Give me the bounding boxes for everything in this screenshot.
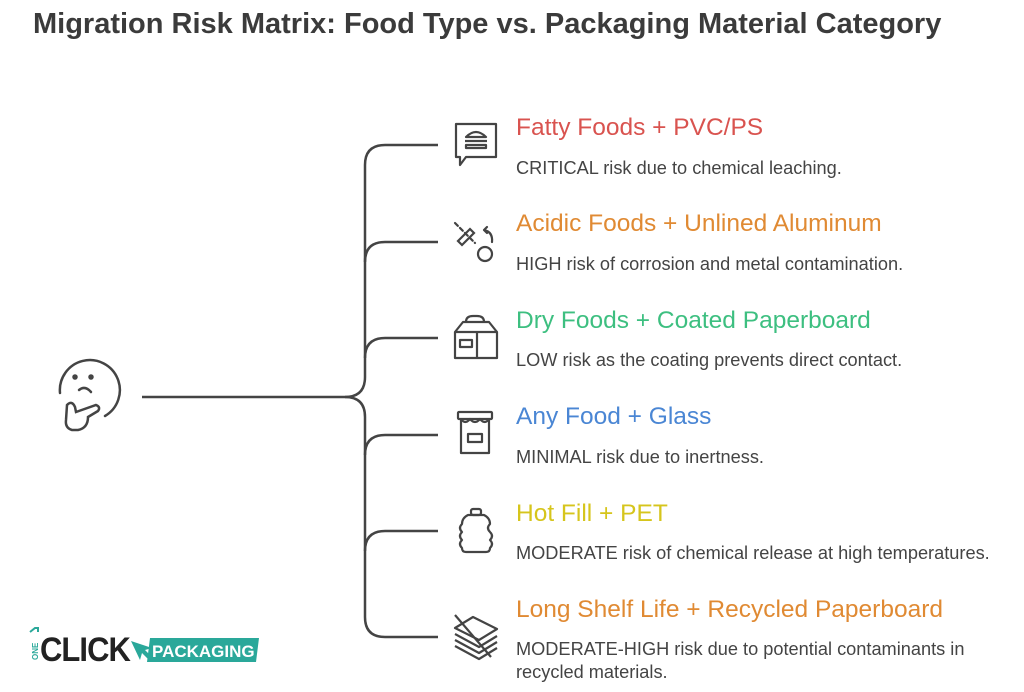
icon: bottle — [460, 509, 492, 552]
item 1: fatty foods: CRITICAL risk due to chemical leaching. — [516, 158, 842, 178]
item 4: any food glass: MINIMAL risk due to inertness. — [516, 447, 764, 467]
item 1: fatty foods: Fatty Foods + PVC/PS — [516, 114, 763, 141]
item 3: dry foods: Dry Foods + Coated Paperboard — [516, 307, 871, 334]
item 4: any food glass — [458, 403, 764, 467]
item 3: dry foods — [455, 307, 902, 370]
item 5: hot fill PET: MODERATE risk of chemical release at high temperatures. — [516, 543, 990, 563]
logo: ONE — [31, 642, 40, 660]
item 5: hot fill PET: Hot Fill + PET — [516, 500, 668, 527]
title: Migration Risk Matrix: Food Type vs. Packaging Material Category — [33, 8, 941, 40]
tree connector — [142, 145, 438, 637]
icon: can and fruit — [455, 223, 492, 261]
item 6: long shelf life: Long Shelf Life + Recycled Paperboard — [516, 596, 943, 623]
icon: jar — [458, 412, 492, 453]
logo: CLICK — [40, 631, 131, 669]
item 3: dry foods: LOW risk as the coating prevents direct contact. — [516, 350, 902, 370]
icon: burger bubble — [456, 124, 496, 165]
item 4: any food glass: Any Food + Glass — [516, 403, 711, 430]
item 5: hot fill PET — [460, 500, 990, 563]
logo — [30, 628, 259, 669]
item 2: acidic foods: HIGH risk of corrosion and metal contamination. — [516, 254, 903, 274]
icon: carton — [455, 316, 497, 358]
item 6: long shelf life: recycled materials. — [516, 662, 668, 682]
item 6: long shelf life — [455, 596, 964, 682]
item 1: fatty foods — [456, 114, 842, 178]
logo: PACKAGING — [152, 642, 255, 661]
icon: thinking face — [60, 360, 120, 430]
icon: crossed stack — [455, 615, 497, 659]
item 6: long shelf life: MODERATE-HIGH risk due to potential contaminants in — [516, 639, 964, 659]
item 2: acidic foods: Acidic Foods + Unlined Aluminum — [516, 210, 882, 237]
item 2: acidic foods — [455, 210, 903, 274]
